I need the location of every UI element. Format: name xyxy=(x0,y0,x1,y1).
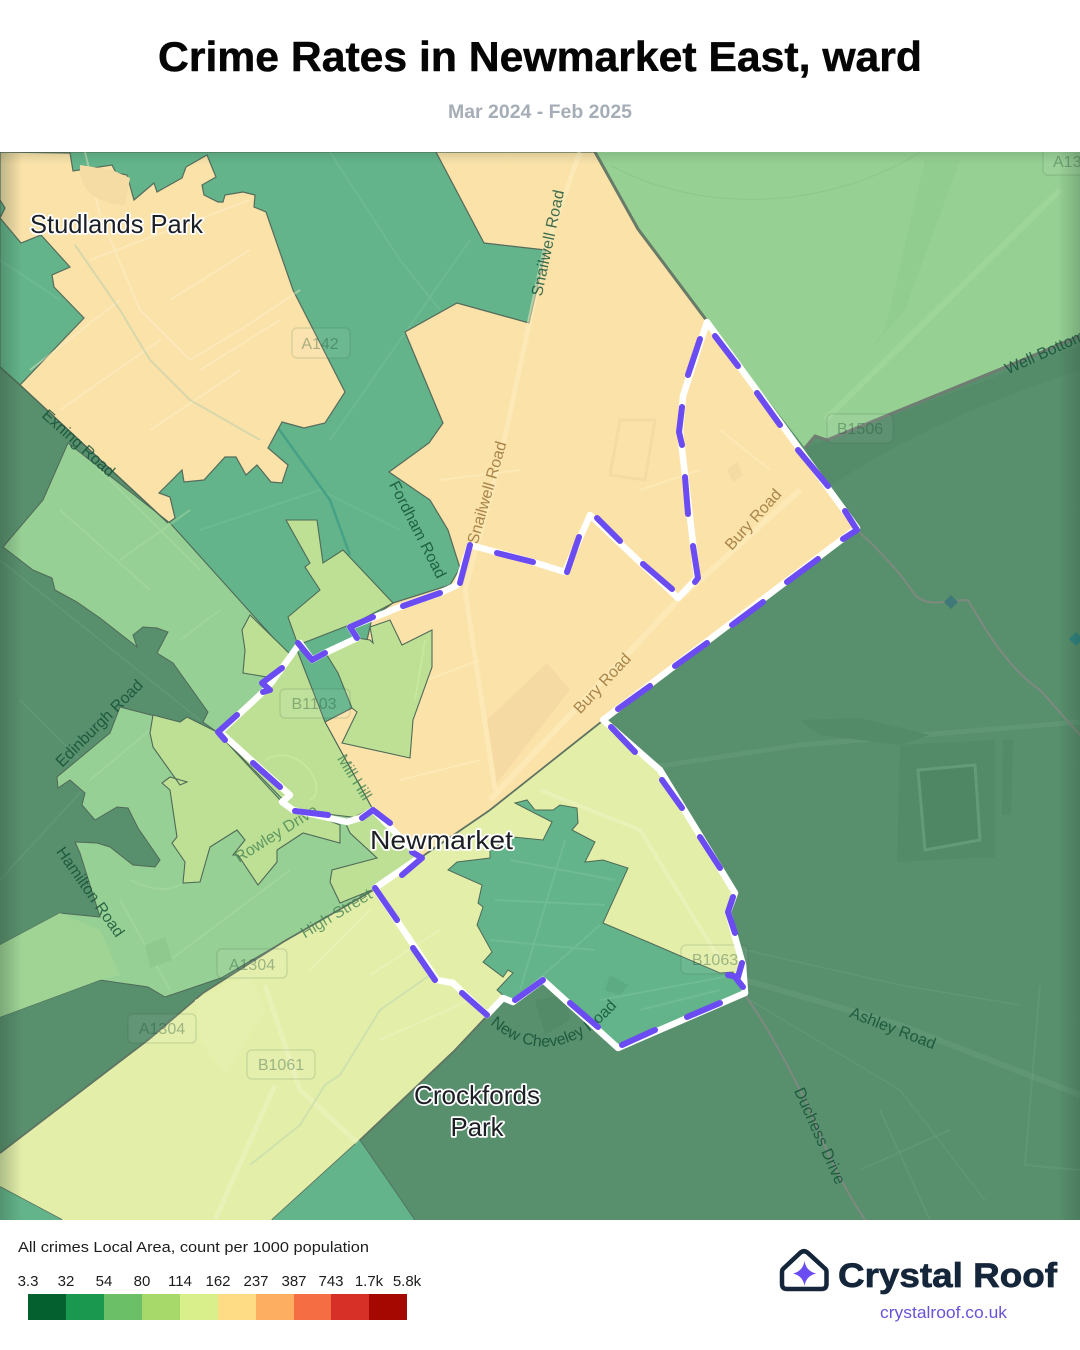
road shield labels: A1304 xyxy=(139,1021,185,1038)
map panel xyxy=(0,152,1080,1220)
road name labels: Edinburgh Road xyxy=(53,677,147,771)
road name labels: Ashley Road xyxy=(847,1005,938,1053)
region: north-west and central green areas xyxy=(0,152,546,722)
icon: blue diamond markers xyxy=(944,595,1080,646)
legend: scale values: 743 xyxy=(318,1273,344,1290)
icon: Crystal Roof house logo xyxy=(782,1251,826,1289)
brand url: crystalroof.co.uk xyxy=(880,1304,1008,1322)
region: south-east mid green xyxy=(448,800,745,1048)
ward boundary: purple dashes xyxy=(218,336,857,1045)
legend title: All crimes Local Area, count per 1000 population xyxy=(18,1239,369,1256)
road shield labels: B1506 xyxy=(837,421,883,438)
road name labels: Bury Road xyxy=(722,486,785,554)
legend: scale values: 3.3 xyxy=(18,1273,38,1290)
road shield labels: A1304 xyxy=(229,957,275,974)
ward boundary: white underlay xyxy=(220,322,857,1048)
place labels: Studlands Park xyxy=(30,209,204,239)
road name labels: Bury Road xyxy=(571,650,635,717)
region: central cream area (ward north) xyxy=(325,152,858,858)
place labels: Crockfords xyxy=(414,1080,540,1110)
legend: scale values: 80 xyxy=(134,1273,150,1290)
region: south pale band xyxy=(0,722,745,1220)
road name labels xyxy=(42,190,1080,1184)
brand name: Crystal Roof xyxy=(838,1257,1058,1295)
road shield labels: B1103 xyxy=(291,696,337,713)
region: south-west mid green triangles xyxy=(0,1140,415,1220)
road name labels: Snailwell Road xyxy=(465,440,510,546)
road shield labels: B1063 xyxy=(692,952,738,969)
legend: colour bar xyxy=(28,1294,407,1320)
region: north-east light green fields xyxy=(595,152,1080,448)
map edge vignette xyxy=(0,152,1080,1220)
legend: scale values: 162 xyxy=(205,1273,231,1290)
road shield labels: B1061 xyxy=(258,1057,304,1074)
region: south-west medium green xyxy=(0,707,380,1017)
road shield labels xyxy=(128,148,1080,1079)
legend: scale values: 114 xyxy=(168,1273,192,1290)
place labels: Newmarket xyxy=(370,825,514,855)
legend: scale values: 54 xyxy=(96,1273,112,1290)
road name labels: New Cheveley Road xyxy=(491,999,616,1047)
place labels: Park xyxy=(450,1112,504,1142)
road shield labels: A142 xyxy=(301,336,339,353)
road name labels: Mill Hill xyxy=(333,752,374,804)
road name labels: Snailwell Road xyxy=(529,188,568,298)
road name labels: Exning Road xyxy=(38,407,118,481)
legend: scale values xyxy=(18,1273,422,1290)
road name labels: Fordham Road xyxy=(385,479,449,581)
region: north-west cream area (Studlands Park) xyxy=(0,152,345,523)
legend: scale values: 5.8k xyxy=(393,1273,422,1290)
road name labels: Duchess Drive xyxy=(790,1085,848,1187)
subtitle: date range: Mar 2024 - Feb 2025 xyxy=(448,102,632,123)
legend: scale values: 32 xyxy=(58,1273,74,1290)
region: west strip light green xyxy=(3,443,300,732)
legend: scale values: 237 xyxy=(243,1273,269,1290)
title: Crime Rates in Newmarket East, ward xyxy=(158,33,922,80)
road name labels: High Street xyxy=(298,886,376,942)
road name labels: Hamilton Road xyxy=(52,844,127,941)
legend: scale values: 387 xyxy=(281,1273,307,1290)
region: lime areas west of the centre xyxy=(150,520,432,903)
place labels xyxy=(30,209,540,1142)
legend: scale values: 1.7k xyxy=(355,1273,384,1290)
road name labels: Rowley Drive xyxy=(232,802,321,866)
